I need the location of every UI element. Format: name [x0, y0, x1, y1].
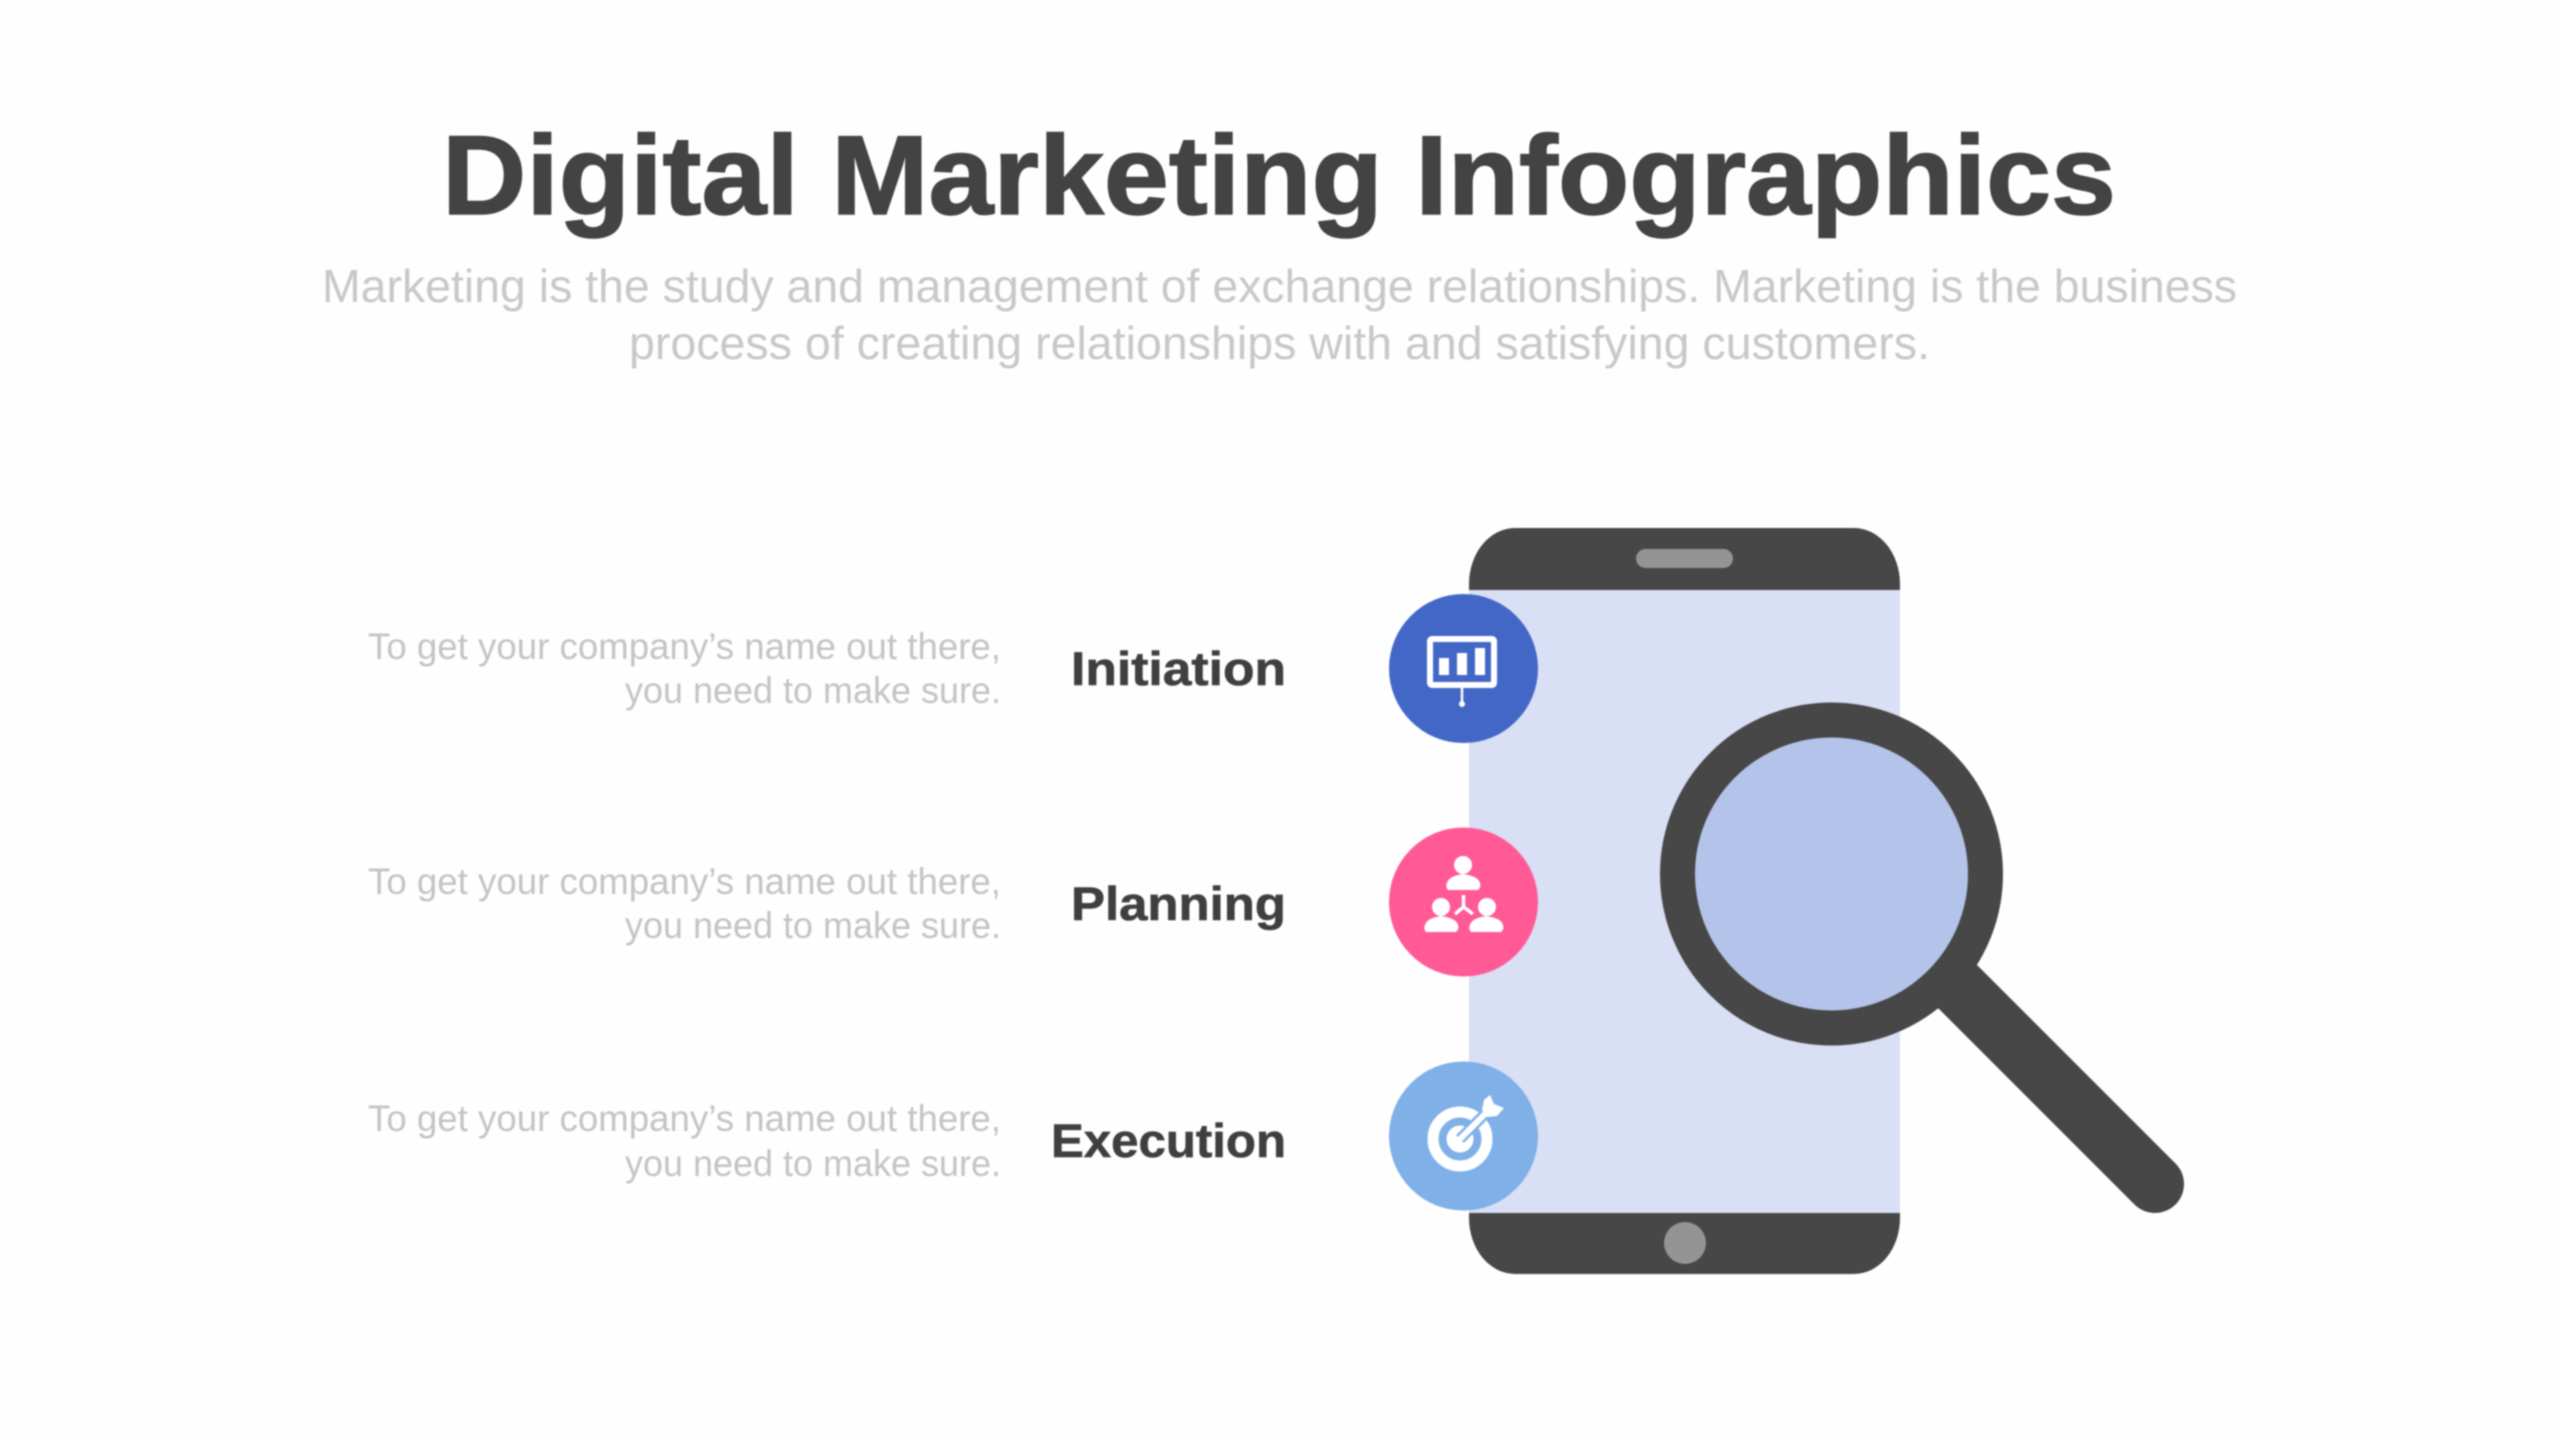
- heading: Execution: Execution: [1051, 1114, 1286, 1167]
- text block: planning description: To get your company’s name out there,: [368, 861, 1001, 902]
- icon: presentation board on blue circle: [1389, 594, 1538, 743]
- subtitle text: Marketing is the study and management of exchange relationships. Marketing is the business: [322, 260, 2237, 312]
- subtitle text: [322, 260, 2237, 369]
- text block: initiation description: To get your company’s name out there,: [368, 626, 1001, 667]
- text block: initiation description: [368, 626, 1001, 711]
- phone illustration: [1469, 528, 1900, 1274]
- text block: planning description: [368, 861, 1001, 946]
- text block: initiation description: you need to make sure.: [625, 670, 1001, 711]
- heading: Initiation: Initiation: [1071, 642, 1286, 695]
- title: Digital Marketing Infographics: [442, 113, 2116, 238]
- icon: target with arrow on light blue circle: [1389, 1062, 1538, 1210]
- subtitle text: process of creating relationships with and satisfying customers.: [629, 317, 1930, 369]
- icon: team hierarchy on pink circle: [1389, 828, 1538, 976]
- text block: execution description: you need to make sure.: [625, 1143, 1001, 1184]
- heading: Planning: Planning: [1071, 877, 1286, 930]
- text block: planning description: you need to make sure.: [625, 905, 1001, 946]
- text block: execution description: To get your company’s name out there,: [368, 1098, 1001, 1139]
- text block: execution description: [368, 1098, 1001, 1184]
- icon: magnifying glass: [1678, 720, 2155, 1184]
